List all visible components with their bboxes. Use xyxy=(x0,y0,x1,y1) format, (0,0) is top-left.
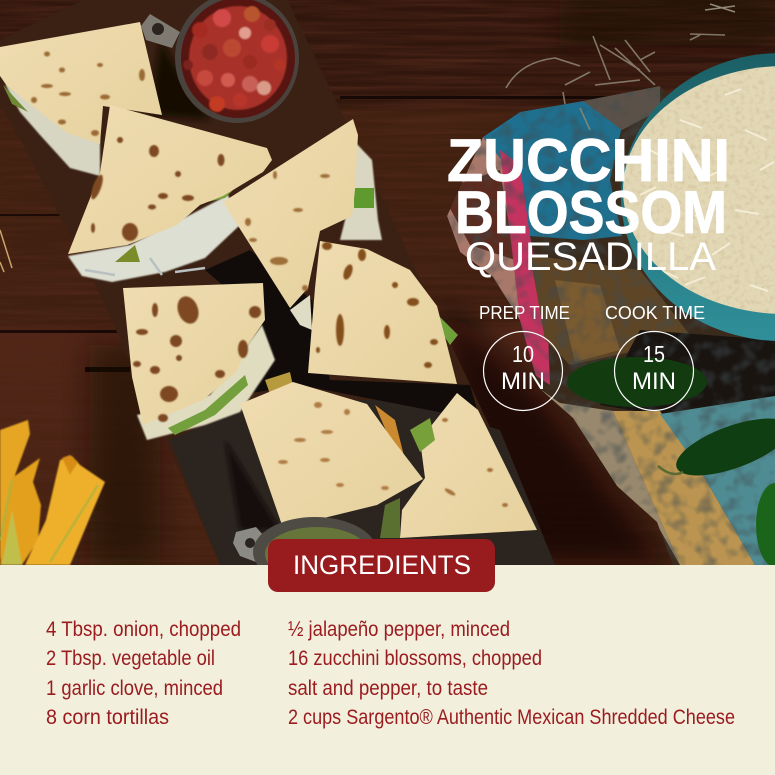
green salsa bowl xyxy=(233,517,377,587)
ingredients heading xyxy=(268,539,495,592)
title: BLOSSOM xyxy=(455,179,727,246)
cook time: COOK TIME xyxy=(605,302,705,323)
title: QUESADILLA xyxy=(465,235,716,279)
cheese bowl xyxy=(620,53,775,341)
cream ingredients panel xyxy=(0,565,775,775)
ingredients list: left column xyxy=(46,618,241,729)
cook time: MIN xyxy=(632,368,676,395)
quesadilla wedge 3 xyxy=(223,119,382,308)
title xyxy=(447,127,730,279)
jalapeno peppers xyxy=(567,357,775,567)
cook time: 15 xyxy=(643,341,665,367)
toothpicks xyxy=(0,230,12,272)
prep time: 10 xyxy=(512,341,534,367)
ingredients list: left column: 8 corn tortillas xyxy=(46,706,169,729)
cook time xyxy=(605,302,705,410)
ingredients heading: INGREDIENTS xyxy=(293,550,471,580)
quesadilla wedge 1 xyxy=(0,22,162,176)
ingredients list: right column: salt and pepper, to taste xyxy=(288,677,488,700)
quesadilla wedge 7 xyxy=(380,393,537,538)
colorful cloth xyxy=(440,80,775,570)
wood table background xyxy=(0,0,775,565)
title: ZUCCHINI xyxy=(447,127,730,194)
quesadilla wedge 6 xyxy=(240,372,423,528)
quesadilla wedge 5 xyxy=(123,283,275,440)
quesadilla wedge 4 xyxy=(290,241,458,384)
ingredients list: left column: 1 garlic clove, minced xyxy=(46,677,223,700)
salsa bowl xyxy=(141,0,299,123)
prep time: MIN xyxy=(501,368,545,395)
prep time: PREP TIME xyxy=(479,302,570,323)
ingredients list: right column xyxy=(288,618,735,729)
ingredients list: left column: 2 Tbsp. vegetable oil xyxy=(46,647,215,670)
quesadilla wedge 2 xyxy=(68,105,272,282)
prep time xyxy=(479,302,570,410)
ingredients list: right column: ½ jalapeño pepper, minced xyxy=(288,618,510,641)
wooden serving board xyxy=(0,0,555,565)
ingredients list: right column: 16 zucchini blossoms, chopped xyxy=(288,647,542,670)
ingredients list: left column: 4 Tbsp. onion, chopped xyxy=(46,618,241,641)
loose shredded cheese on table xyxy=(506,4,735,130)
zucchini blossoms xyxy=(0,420,105,565)
